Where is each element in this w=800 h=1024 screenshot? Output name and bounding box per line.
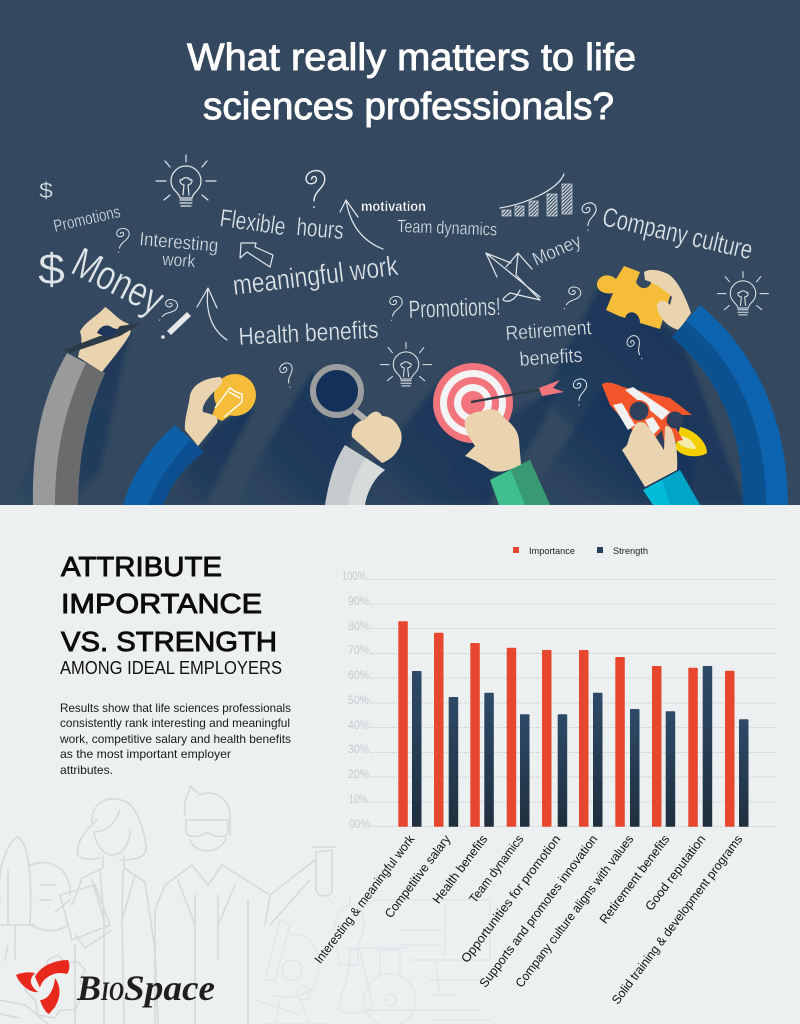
category labels — [312, 832, 745, 1007]
icon: rising bar graph — [500, 174, 572, 216]
chalk words: Company culture — [600, 202, 755, 265]
chalk words: motivation — [361, 198, 426, 214]
text block: results summary: consistently rank interesting and meaningful — [60, 716, 290, 730]
logo: BioSpace: Space — [124, 968, 215, 1008]
chalk words: Team dynamics — [397, 216, 497, 239]
chart axis labels: 60% — [348, 670, 369, 682]
chart legend: Importance — [529, 546, 575, 557]
chart axis labels: 90% — [348, 596, 369, 608]
title: sciences professionals? — [203, 86, 614, 128]
chart legend — [513, 546, 648, 557]
panel: header illustration — [0, 0, 800, 505]
category labels: Supports and promotes innovation — [477, 832, 600, 990]
text block: results summary: Results show that life sciences professionals — [60, 701, 291, 715]
chalk words: Retirement — [505, 317, 593, 345]
text block: results summary: as the most important employer — [60, 747, 231, 761]
chalk words: Money — [65, 238, 172, 324]
hand and arm: writing — [33, 307, 142, 505]
chalk words: Interesting — [139, 229, 219, 257]
category labels: Solid training & development programs — [609, 832, 745, 1007]
chalk words: Promotions — [52, 202, 122, 236]
chart axis labels: 80% — [348, 621, 369, 633]
heading: attribute importance vs. strength — [61, 551, 277, 657]
chart axis labels: 20% — [348, 769, 369, 781]
chalk words: Money — [529, 230, 585, 271]
icon and hand: magnifying glass — [313, 367, 402, 505]
category labels: Good reputation — [642, 832, 708, 913]
logo: BioSpace: B — [76, 968, 101, 1008]
chart axis labels: 100% — [342, 571, 366, 583]
chalk words: $ — [38, 245, 65, 294]
heading: attribute importance vs. strength: VS. STRENGTH — [61, 626, 277, 657]
category labels: Opportunities for promotion — [458, 832, 563, 965]
chalk words: work — [161, 249, 197, 271]
chalk words: meaningful work — [231, 250, 400, 301]
chart axis labels: 00% — [349, 819, 370, 831]
category labels: Team dynamics — [466, 832, 526, 905]
heading: attribute importance vs. strength: ATTRIBUTE — [61, 551, 222, 582]
strength bars — [412, 666, 748, 827]
logo: BioSpace — [16, 960, 215, 1014]
chalk words: hours — [295, 213, 345, 245]
chart axis labels: 50% — [348, 695, 369, 707]
chalk words: Flexible — [218, 204, 287, 241]
illustration: faint scientists line art — [0, 786, 490, 1024]
category labels: Interesting & meaningful work — [312, 832, 418, 966]
icon: chalk arrows — [161, 200, 540, 340]
icon and hand: target with dart — [433, 363, 564, 505]
long shadows — [10, 285, 745, 505]
icon and hand: rocket — [602, 383, 707, 505]
chalk words: Promotions! — [408, 293, 501, 324]
importance bars — [398, 621, 734, 827]
icon and hand: puzzle piece — [597, 266, 788, 505]
title — [187, 37, 636, 128]
chart axis labels: 70% — [348, 645, 369, 657]
heading: attribute importance vs. strength: IMPORTANCE — [61, 588, 262, 619]
chart legend: Strength — [613, 546, 648, 557]
chalk words — [38, 178, 755, 371]
hand and arm: light bulb — [123, 374, 256, 505]
chart axis labels: 10% — [349, 794, 367, 806]
chalk words: Health benefits — [238, 316, 379, 351]
panel: lower section — [0, 546, 776, 1024]
chalk words: $ — [39, 178, 53, 203]
chart axis labels — [342, 571, 370, 831]
chart axis labels: 30% — [348, 744, 369, 756]
icon: light bulbs — [156, 155, 768, 386]
subheading: AMONG IDEAL EMPLOYERS — [60, 658, 282, 678]
chalk words: benefits — [519, 345, 583, 371]
text block: results summary — [59, 701, 291, 777]
chart axis labels: 40% — [348, 720, 369, 732]
text block: results summary: attributes. — [60, 763, 113, 777]
category labels: Retirement benefits — [597, 832, 672, 926]
category labels: Competitive salary — [382, 832, 454, 921]
logo: BioSpace: IO — [100, 977, 124, 1006]
icon: question marks — [113, 171, 648, 405]
bar chart: importance vs strength — [312, 571, 776, 1007]
title: What really matters to life — [187, 37, 636, 79]
category labels: Company culture aligns with values — [513, 832, 636, 990]
text block: results summary: work, competitive salary and health benefits — [59, 732, 291, 746]
category labels: Health benefits — [430, 832, 490, 906]
